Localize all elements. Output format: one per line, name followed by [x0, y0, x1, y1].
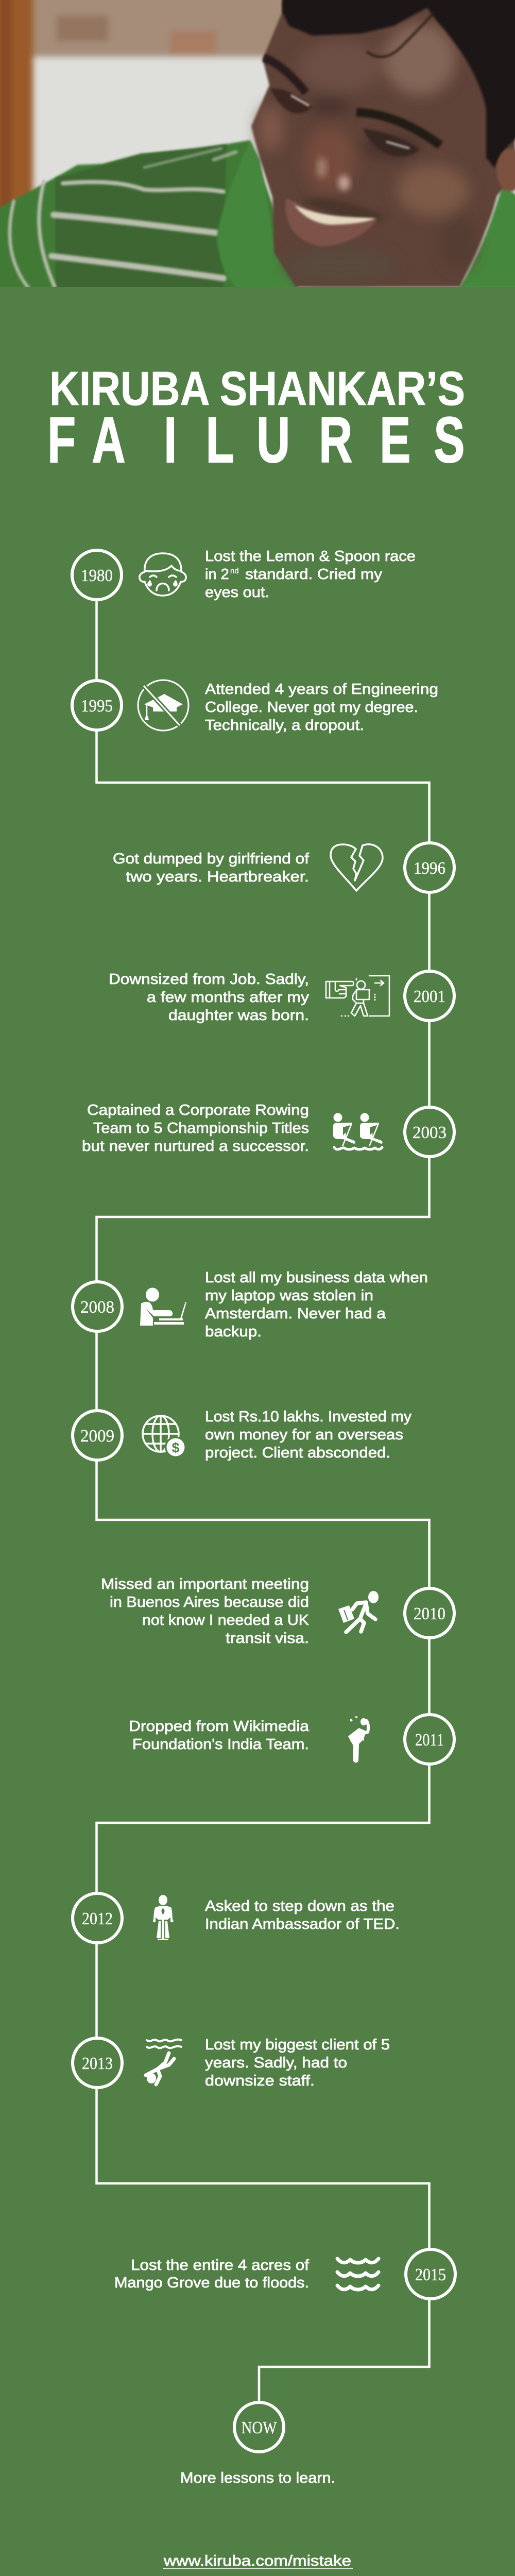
icon: no graduation cap [138, 680, 188, 731]
year node 1996: 1996 [414, 859, 445, 878]
entry 2012 [73, 1893, 400, 1943]
text 2009 [205, 1409, 412, 1461]
text 1996: Got dumped by girlfriend of [113, 851, 310, 867]
text 2013: years. Sadly, had to [205, 2055, 347, 2071]
year node 2009: 2009 [80, 1427, 114, 1446]
text 2010: transit visa. [226, 1630, 309, 1647]
year node 2012 [73, 1893, 122, 1943]
year node 2015 [406, 2249, 455, 2299]
year node 1980: 1980 [81, 566, 113, 585]
text 2003: Team to 5 Championship Titles [93, 1120, 309, 1137]
icon: globe with dollar coin [143, 1416, 186, 1458]
year node 2013 [73, 2038, 122, 2088]
text 1980: Lost the Lemon & Spoon race [205, 548, 416, 565]
year node 2012: 2012 [82, 1909, 113, 1928]
text 2013: downsize staff. [205, 2073, 315, 2089]
entry now [180, 2402, 335, 2486]
icon: speaker at podium [153, 1895, 174, 1940]
icon: running man with briefcase [338, 1591, 379, 1632]
text 2011: Dropped from Wikimedia [129, 1718, 310, 1735]
node NOW [234, 2402, 284, 2452]
year node 2010 [405, 1588, 454, 1638]
year node 1995 [72, 681, 122, 730]
icon: pointing hand showing employee the exit [326, 976, 389, 1016]
text 2003: but never nurtured a successor. [82, 1138, 309, 1155]
text 1996: two years. Heartbreaker. [126, 869, 309, 885]
title line: Failures: FAILURES [47, 404, 465, 477]
text 2009: own money for an overseas [205, 1427, 403, 1443]
year node 2001: 2001 [414, 987, 445, 1006]
year node 2013: 2013 [82, 2054, 113, 2073]
year node 2003 [405, 1107, 454, 1157]
text 2003 [82, 1102, 309, 1155]
text 2010 [101, 1576, 310, 1647]
text 1995 [205, 681, 438, 734]
entry 1980 [72, 548, 416, 601]
text: more lessons to learn: More lessons to learn. [180, 2470, 335, 2486]
icon: broken heart [331, 844, 383, 891]
entry 2009 [73, 1409, 412, 1461]
title [47, 362, 465, 477]
year node 2008 [73, 1282, 122, 1331]
icon: flood waves [337, 2259, 379, 2290]
icon: person at laptop [140, 1288, 186, 1326]
icon: two rowers [333, 1113, 383, 1149]
text 1995: Attended 4 years of Engineering [205, 681, 438, 698]
entry 1995 [72, 680, 438, 734]
year node 2011 [405, 1715, 454, 1764]
text 2009: Lost Rs.10 lakhs. Invested my [205, 1409, 412, 1425]
text 2001: a few months after my [147, 989, 310, 1006]
text 2013: Lost my biggest client of 5 [205, 2037, 390, 2053]
entry 2001 [109, 971, 454, 1024]
text 2013 [205, 2037, 390, 2089]
text 2009: project. Client absconded. [205, 1445, 390, 1461]
text 2012 [205, 1898, 400, 1933]
text 1980: nd [230, 567, 239, 575]
white divider band [0, 287, 515, 290]
text 1980: standard. Cried my [245, 566, 383, 583]
collar [217, 140, 299, 289]
text 2010: in Buenos Aires because did [110, 1594, 309, 1611]
text 2011: Foundation's India Team. [132, 1736, 309, 1753]
year node 2015: 2015 [415, 2265, 446, 2284]
icon: crying child [140, 553, 186, 596]
text 2015: Mango Grove due to floods. [114, 2275, 309, 2291]
text 2015: Lost the entire 4 acres of [131, 2257, 310, 2274]
text 2001 [109, 971, 310, 1024]
text 2008: backup. [205, 1324, 262, 1340]
year node 1995: 1995 [81, 697, 113, 716]
face [251, 0, 515, 287]
year node 1980 [72, 550, 122, 600]
text 2008: my laptop was stolen in [205, 1287, 373, 1304]
text 2011 [129, 1718, 310, 1753]
entry 2010 [101, 1576, 454, 1647]
year node 2008: 2008 [80, 1298, 114, 1317]
shirt stripes [10, 148, 236, 289]
icon: man sinking below waves [146, 2040, 181, 2084]
year node 2009 [73, 1411, 122, 1460]
text 2010: not know I needed a UK [142, 1612, 310, 1629]
mustache and mouth [301, 198, 385, 222]
year node 2010: 2010 [414, 1604, 445, 1623]
text 2015 [114, 2257, 310, 2291]
text 2003: Captained a Corporate Rowing [87, 1102, 309, 1118]
text 2001: daughter was born. [168, 1007, 309, 1024]
eyebrows [264, 58, 306, 93]
entry 2003 [82, 1102, 454, 1157]
entry 2011 [129, 1715, 454, 1764]
node NOW: NOW [241, 2418, 277, 2437]
year node 2001 [405, 971, 454, 1021]
timeline path [97, 575, 430, 2427]
shirt [0, 140, 299, 294]
text 2012: Asked to step down as the [205, 1898, 394, 1914]
text 2001: Downsized from Job. Sadly, [109, 971, 309, 988]
text 1995: College. Never got my degree. [205, 699, 418, 716]
footer link: www.kiruba.com/mistake [163, 2553, 351, 2569]
hair [282, 0, 515, 167]
entry 2015 [114, 2249, 455, 2299]
icon: person stabbed in the back [348, 1716, 368, 1763]
text 2010: Missed an important meeting [101, 1576, 309, 1592]
text 2008: Amsterdam. Never had a [205, 1306, 386, 1322]
icon: globe with dollar coin: $ [171, 1440, 180, 1455]
text 1980 [205, 548, 416, 601]
text 1995: Technically, a dropout. [205, 717, 364, 734]
entry 2008 [73, 1269, 428, 1340]
text 2008 [205, 1269, 428, 1340]
eyes [270, 89, 312, 113]
entry 2013 [73, 2037, 390, 2089]
text 2008: Lost all my business data when [205, 1269, 428, 1286]
text 1980: in 2 [205, 566, 229, 583]
text 2012: Indian Ambassador of TED. [205, 1916, 400, 1933]
year node 2003: 2003 [413, 1123, 447, 1142]
text 1996 [113, 851, 310, 885]
text 1980: eyes out. [205, 584, 269, 601]
header photo: smiling man in green striped shirt [0, 0, 515, 294]
ear [496, 148, 515, 192]
year node 2011: 2011 [415, 1731, 444, 1750]
year node 1996 [405, 843, 454, 892]
entry 1996 [113, 843, 454, 892]
